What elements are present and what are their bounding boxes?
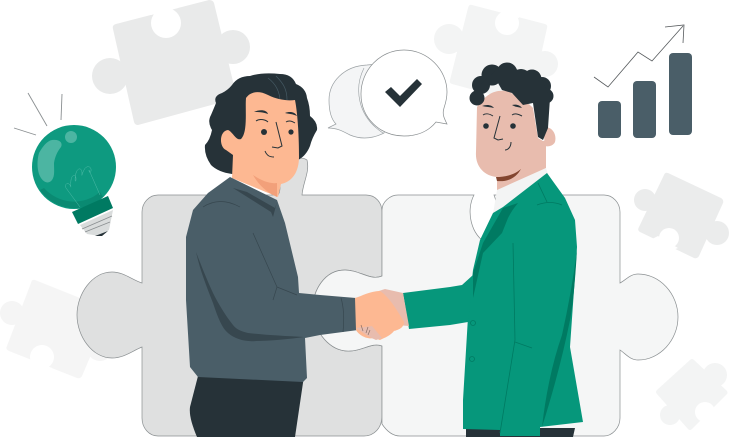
right man hair <box>470 62 554 140</box>
right man neck and face <box>476 91 546 197</box>
speech bubble: front <box>361 50 447 136</box>
right man jacket sleeve shadow <box>542 250 577 427</box>
left man hair strands <box>268 76 287 102</box>
right man nose and mouth <box>483 114 522 150</box>
right man jacket fold lines <box>500 183 562 433</box>
left man chin shadow <box>253 175 277 197</box>
bulb highlights <box>38 140 62 182</box>
right man pants <box>466 428 575 437</box>
right man jacket <box>463 173 583 436</box>
right man shirt collar <box>493 168 548 214</box>
right man jacket lapel shadow <box>473 203 518 298</box>
right large puzzle piece <box>313 195 678 436</box>
fingers underside <box>356 326 382 340</box>
background puzzle piece: right <box>634 173 729 258</box>
right man ear <box>543 127 555 146</box>
left man pants <box>190 376 304 437</box>
handshake <box>355 289 409 340</box>
person: left man <box>186 73 358 437</box>
left man nose and mouth <box>256 119 295 157</box>
left man eyes and brows <box>254 110 297 135</box>
background puzzle piece: top right <box>434 5 558 105</box>
right man jacket buttons <box>470 320 476 362</box>
background puzzle piece: top left <box>92 0 250 125</box>
bar 3 <box>669 53 692 135</box>
left man collar <box>233 188 277 217</box>
icon: light bulb <box>14 93 116 236</box>
right man's hand <box>366 289 409 326</box>
background puzzle piece: lower right <box>656 359 728 434</box>
left large puzzle piece <box>77 158 382 436</box>
bulb thread <box>80 210 113 236</box>
bar 2 <box>633 81 656 138</box>
right man beard shadow <box>496 169 521 181</box>
left man hair <box>205 73 317 174</box>
chart: rising bars with arrow <box>594 25 692 138</box>
right man eyes and brows <box>482 105 522 129</box>
bulb filament <box>65 167 100 207</box>
left man's hand <box>355 291 404 340</box>
right man sleeve <box>403 275 473 329</box>
left man shirt <box>186 177 358 382</box>
bulb cap <box>72 196 113 224</box>
left man arm shadow <box>196 252 304 341</box>
icon: check mark <box>385 79 422 107</box>
speech bubble: back <box>328 65 398 138</box>
left man fold lines <box>203 202 344 332</box>
left man neck and face <box>221 92 299 197</box>
bulb glass <box>32 125 116 209</box>
person: right man <box>403 62 583 437</box>
trend arrow <box>594 25 684 87</box>
bulb rays <box>14 93 62 135</box>
background puzzle piece: lower left <box>0 280 113 378</box>
bar 1 <box>598 101 621 138</box>
